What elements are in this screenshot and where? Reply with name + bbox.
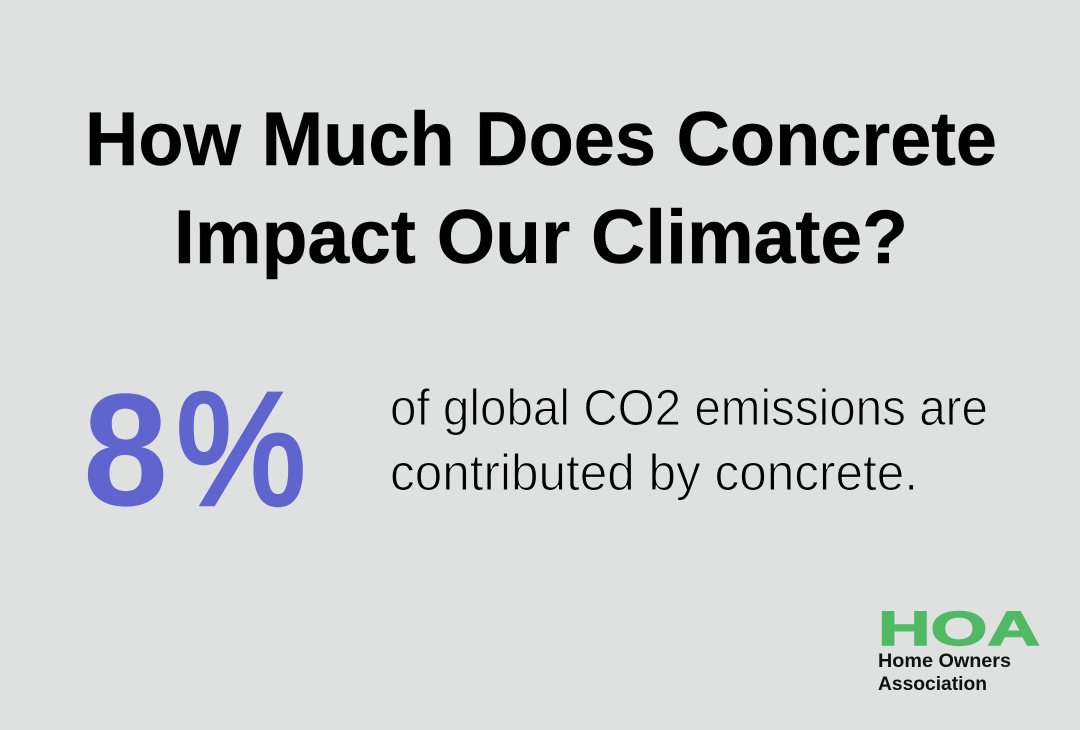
title — [85, 97, 997, 280]
description text — [390, 379, 988, 501]
logo: Home Owners Association — [878, 603, 1040, 695]
description text: of global CO2 emissions are — [390, 379, 988, 436]
statistic: 8% — [83, 359, 306, 539]
title: Impact Our Climate? — [174, 195, 908, 280]
statistic: 8%: % — [176, 359, 306, 538]
logo: Home Owners Association: HOA — [878, 603, 1040, 656]
statistic: 8%: 8 — [83, 360, 168, 539]
title: How Much Does Concrete — [85, 97, 997, 182]
logo: Home Owners Association: Association — [878, 674, 987, 695]
logo: Home Owners Association: Home Owners — [878, 651, 1011, 672]
description text: contributed by concrete. — [390, 444, 918, 501]
